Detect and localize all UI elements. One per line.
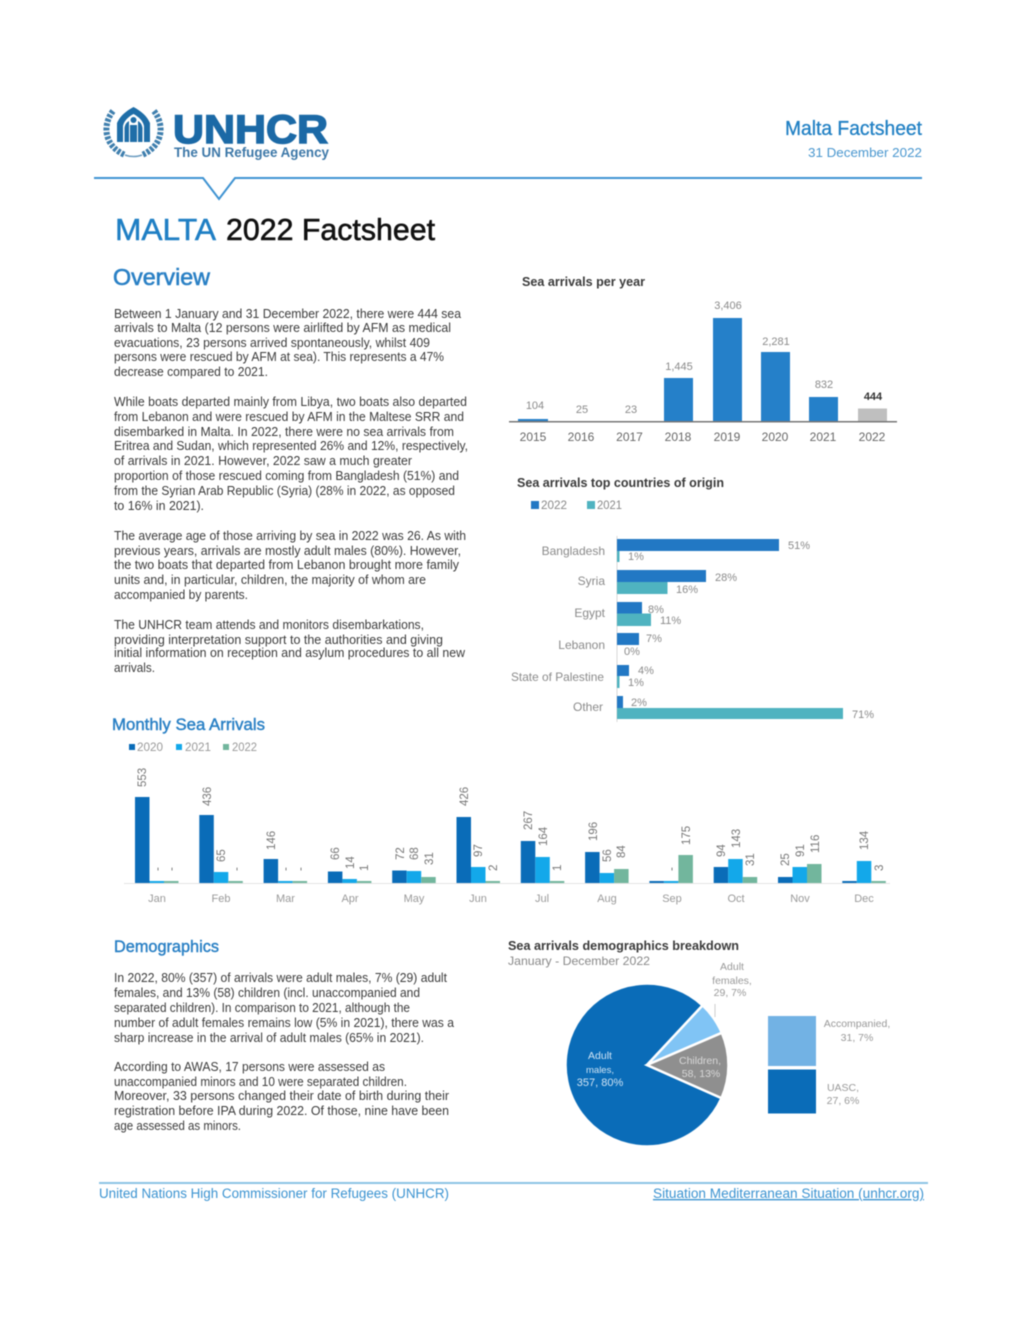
label: adult females <box>712 961 752 999</box>
country labels: Egypt <box>574 606 606 620</box>
footer: Situation Mediterranean Situation (unhcr.org) <box>653 1186 924 1201</box>
text block: demographics: separated children). In comparison to 2021, although the <box>114 1001 410 1015</box>
rotated value labels: 134 <box>859 830 871 850</box>
value labels: 4% <box>638 665 654 677</box>
rotated value labels: 91 <box>795 844 807 857</box>
label: adult males: 357, 80% <box>577 1077 623 1089</box>
chart: sea arrivals demographics breakdown <box>508 938 890 1147</box>
label: UASC: UASC, <box>827 1082 859 1094</box>
label: adult males <box>577 1050 623 1089</box>
country labels: Lebanon <box>558 638 605 652</box>
rotated value labels: 553 <box>137 768 149 787</box>
rotated value labels: - <box>152 867 164 871</box>
rotated value labels: 25 <box>780 853 792 866</box>
text block: overview: previous years, arrivals are mostly adult males (80%). However, <box>114 544 461 558</box>
chart: sea arrivals top countries of origin <box>511 475 874 722</box>
header: document name and date <box>785 118 922 160</box>
pie: adult males <box>566 984 722 1147</box>
rotated value labels: - <box>166 867 178 871</box>
label: accompanied: 31, 7% <box>841 1032 873 1044</box>
country labels: State of Palestine <box>511 670 604 684</box>
rotated value labels: 31 <box>424 852 436 865</box>
rotated value labels: - <box>280 867 292 871</box>
legend: 2021 <box>597 500 622 512</box>
text block: overview: While boats departed mainly from Libya, two boats also departed <box>114 395 467 409</box>
rotated value labels: 14 <box>345 856 357 869</box>
text block: overview: evacuations, 23 persons arrived spontaneously, whilst 409 <box>114 336 430 350</box>
year labels: 2016 <box>568 430 595 444</box>
text block: demographics: Moreover, 33 persons changed their date of birth during their <box>114 1089 449 1103</box>
value labels: 16% <box>676 584 698 596</box>
rotated value labels: 116 <box>810 835 822 853</box>
text block: overview: Eritrea and Sudan, which represented 26% and 12%, respectively, <box>114 439 468 453</box>
footer rule <box>99 1182 928 1184</box>
text block: overview: arrivals to Malta (12 persons were airlifted by AFM as medical <box>114 321 451 335</box>
rotated value labels: 2 <box>488 865 500 871</box>
footer <box>99 1186 924 1201</box>
label: adult females: females, <box>712 975 752 987</box>
label: accompanied: Accompanied, <box>824 1018 890 1030</box>
rotated value labels: 84 <box>616 845 628 858</box>
value labels: 28% <box>715 572 737 584</box>
text block: overview: The UNHCR team attends and monitors disembarkations, <box>114 618 424 632</box>
text block: overview: initial information on reception and asylum procedures to all new <box>114 646 466 660</box>
text block: demographics: sharp increase in the arrival of adult males (65% in 2021). <box>114 1031 424 1045</box>
bars 2020 <box>135 797 857 883</box>
rotated value labels: 196 <box>588 822 600 841</box>
rotated value labels: 164 <box>538 826 550 846</box>
value labels: 23 <box>625 404 637 416</box>
chart: sea arrivals per year <box>509 274 897 444</box>
label: adult males: males, <box>586 1065 614 1076</box>
text block: overview: decrease compared to 2021. <box>114 365 268 379</box>
value labels: 1,445 <box>665 361 693 373</box>
chart subtitle: January - December 2022 <box>508 954 650 968</box>
label: adult females: 29, 7% <box>714 987 746 999</box>
text block: demographics: number of adult females remains low (5% in 2021), there was a <box>114 1016 454 1030</box>
rotated value labels: 97 <box>473 844 485 857</box>
text block: overview: disembarked in Malta. In 2022, there were no sea arrivals from <box>114 425 454 439</box>
year labels: 2022 <box>859 430 886 444</box>
month labels: Aug <box>597 893 617 905</box>
axis <box>616 536 618 722</box>
label: UASC: 27, 6% <box>827 1095 859 1107</box>
bars 2022 <box>617 539 779 708</box>
country labels <box>511 544 606 714</box>
value labels: 1% <box>628 677 644 689</box>
icon: UNHCR emblem <box>106 107 161 156</box>
header: document name and date: 31 December 2022 <box>808 145 922 160</box>
heading: Demographics: Demographics <box>114 937 219 956</box>
rotated value labels: 1 <box>359 865 371 871</box>
text block: overview: units and, in particular, children, the majority of whom are <box>114 573 426 587</box>
month labels: Jan <box>148 893 166 905</box>
chart: monthly sea arrivals <box>124 742 890 905</box>
year labels: 2020 <box>762 430 789 444</box>
value labels: 832 <box>815 379 833 391</box>
legend <box>531 500 622 512</box>
legend: 2021 <box>185 742 211 754</box>
text block: demographics <box>114 971 454 1133</box>
leader line <box>714 1004 716 1017</box>
label: children <box>679 1055 721 1080</box>
title <box>115 212 435 247</box>
rotated value labels: 68 <box>409 847 421 860</box>
rotated value labels: 31 <box>745 853 757 866</box>
text block: overview: from the Syrian Arab Republic (Syria) (28% in 2022, as opposed <box>114 484 455 498</box>
heading: Overview: Overview <box>113 264 210 290</box>
rotated value labels: 65 <box>216 849 228 862</box>
country labels: Bangladesh <box>542 544 605 558</box>
year labels <box>520 430 886 444</box>
rotated value labels: 72 <box>395 847 407 860</box>
text block: overview: persons were rescued by AFM at sea). This represents a 47% <box>114 350 444 364</box>
value labels: 1% <box>628 551 644 563</box>
label: UASC <box>827 1082 859 1107</box>
value labels <box>526 300 883 416</box>
month labels: Mar <box>276 893 295 905</box>
value labels: 2% <box>631 697 647 709</box>
treemap: accompanied <box>768 1016 816 1066</box>
label: adult females: Adult <box>720 961 744 973</box>
chart title: Sea arrivals per year <box>522 274 645 289</box>
text block: overview: to 16% in 2021). <box>114 499 204 513</box>
bars <box>518 318 887 422</box>
label: accompanied <box>824 1018 890 1044</box>
text block: demographics: age assessed as minors. <box>114 1119 241 1133</box>
month labels: Dec <box>854 893 874 905</box>
text block: demographics: registration before IPA during 2022. Of those, nine have been <box>114 1104 449 1118</box>
text block: demographics: According to AWAS, 17 persons were assessed as <box>114 1060 385 1074</box>
text block: demographics: females, and 13% (58) children (incl. unaccompanied and <box>114 986 420 1000</box>
chart title: Sea arrivals top countries of origin <box>517 475 724 490</box>
rotated value labels: - <box>666 867 678 871</box>
label: adult males: Adult <box>588 1050 612 1062</box>
rotated value labels: 436 <box>202 787 214 806</box>
year labels: 2017 <box>616 430 643 444</box>
chart title: Sea arrivals demographics breakdown <box>508 938 739 953</box>
year labels: 2021 <box>810 430 837 444</box>
value labels: 104 <box>526 400 544 412</box>
text block: overview: accompanied by parents. <box>114 588 248 602</box>
year labels: 2019 <box>714 430 741 444</box>
legend: 2022 <box>232 742 257 754</box>
legend <box>129 742 257 754</box>
month labels: Apr <box>341 893 359 905</box>
label: children: 58, 13% <box>682 1068 720 1080</box>
rotated value labels: 94 <box>716 844 728 857</box>
logo: UNHCR <box>106 107 329 160</box>
rotated value labels: 267 <box>523 811 535 830</box>
month labels: Sep <box>662 893 682 905</box>
header: document name and date: Malta Factsheet <box>785 118 922 140</box>
footer: United Nations High Commissioner for Refugees (UNHCR) <box>99 1186 449 1201</box>
rotated value labels <box>137 768 886 871</box>
pie: children <box>647 1033 728 1098</box>
treemap: UASC <box>768 1070 816 1114</box>
value labels <box>624 540 874 721</box>
rotated value labels: 66 <box>330 847 342 860</box>
year labels: 2015 <box>520 430 547 444</box>
text block: overview <box>114 307 468 675</box>
month labels: Feb <box>212 893 230 905</box>
bars 2021 <box>617 551 843 719</box>
country labels: Other <box>573 700 603 714</box>
legend: 2022 <box>541 500 567 512</box>
rotated value labels: 175 <box>681 826 693 845</box>
title: MALTA <box>115 212 216 247</box>
value labels: 3,406 <box>714 300 742 312</box>
rotated value labels: 3 <box>874 865 886 871</box>
text block: overview: The average age of those arriving by sea in 2022 was 26. As with <box>114 529 466 543</box>
value labels: 444 <box>864 391 883 403</box>
value labels: 25 <box>576 404 588 416</box>
month labels: Jun <box>469 893 487 905</box>
heading: Monthly Sea Arrivals: Monthly Sea Arrivals <box>112 715 265 734</box>
rotated value labels: 426 <box>459 787 471 806</box>
rotated value labels: 146 <box>266 831 278 850</box>
value labels: 7% <box>646 633 662 645</box>
value labels: 0% <box>624 646 640 658</box>
text block: overview: from Lebanon and were rescued by AFM in the Maltese SRR and <box>114 410 464 424</box>
title: 2022 Factsheet <box>226 212 435 247</box>
rotated value labels: - <box>231 867 243 871</box>
axis <box>124 883 890 884</box>
value labels: 11% <box>660 615 681 627</box>
month labels: Jul <box>535 893 549 905</box>
country labels: Syria <box>578 574 605 588</box>
text block: demographics: unaccompanied minors and 10 were separated children. <box>114 1075 407 1089</box>
bars 2022 <box>164 855 886 883</box>
axis <box>509 421 897 422</box>
text block: overview: providing interpretation support to the authorities and giving <box>114 633 443 647</box>
value labels: 51% <box>788 540 810 552</box>
header rule with notch <box>94 178 922 199</box>
text block: overview: the two boats that departed from Lebanon brought more family <box>114 558 460 572</box>
rotated value labels: - <box>295 867 307 871</box>
rotated value labels: 1 <box>552 865 564 871</box>
month labels: Nov <box>790 893 810 905</box>
text block: overview: arrivals. <box>114 661 155 675</box>
logo wordmark: UNHCR <box>173 108 328 152</box>
month labels <box>148 893 874 905</box>
month labels: May <box>404 893 425 905</box>
bars 2021 <box>150 857 871 883</box>
legend: 2020 <box>137 742 163 754</box>
rotated value labels: 56 <box>602 849 614 862</box>
year labels: 2018 <box>665 430 692 444</box>
label: children: Children, <box>679 1055 721 1067</box>
rotated value labels: 143 <box>731 829 743 848</box>
value labels: 2,281 <box>762 336 790 348</box>
logo tagline: The UN Refugee Agency <box>174 145 329 160</box>
pie: adult females <box>647 1005 722 1065</box>
text block: overview: proportion of those rescued coming from Bangladesh (51%) and <box>114 469 459 483</box>
value labels: 8% <box>648 604 664 616</box>
month labels: Oct <box>727 893 745 905</box>
text block: demographics: In 2022, 80% (357) of arrivals were adult males, 7% (29) adult <box>114 971 448 985</box>
value labels: 71% <box>852 709 874 721</box>
text block: overview: Between 1 January and 31 December 2022, there were 444 sea <box>114 307 461 321</box>
text block: overview: of arrivals in 2021. However, 2022 saw a much greater <box>114 454 412 468</box>
